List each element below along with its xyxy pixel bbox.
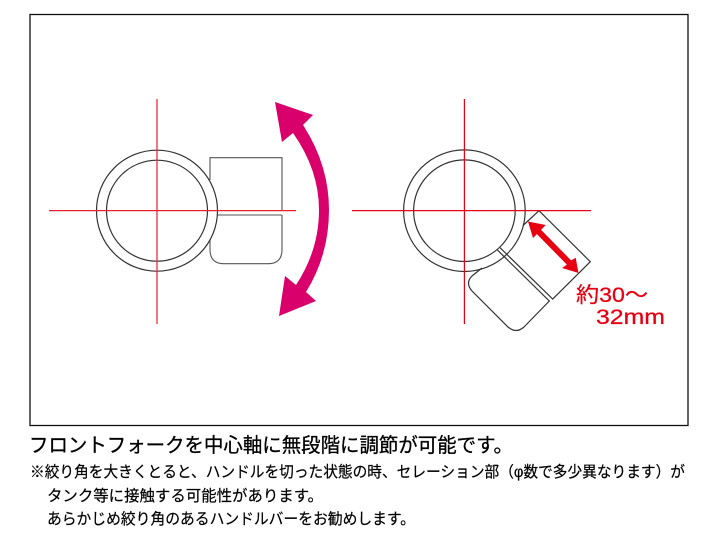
dimension label <box>576 284 665 329</box>
red crosshair <box>352 99 591 324</box>
note text <box>30 463 685 528</box>
handlebar clamp body <box>207 158 282 264</box>
panel: diagram frame <box>30 14 688 426</box>
note text: ※絞り角を大きくとると、ハンドルを切った状態の時、セレーション部（φ数で多少異なります）が <box>30 463 685 481</box>
diagram: fork clamp, straight position <box>49 99 296 324</box>
fork tube rings <box>404 150 525 272</box>
clamp lower block <box>468 249 549 330</box>
diagram: fork clamp, angled position <box>352 99 591 330</box>
clamp upper block <box>500 211 590 299</box>
note text: タンク等に接触する可能性があります。 <box>47 487 323 505</box>
arrow: red width dimension <box>528 222 578 273</box>
note text: あらかじめ絞り角のあるハンドルバーをお勧めします。 <box>47 510 415 528</box>
red crosshair <box>49 99 296 324</box>
arrow: magenta rotation arrow <box>275 102 329 316</box>
dimension label: 約30～ <box>576 284 648 307</box>
fork tube rings <box>96 150 218 271</box>
heading: フロントフォークを中心軸に無段階に調節が可能です。 <box>29 434 513 457</box>
dimension label: 32mm <box>596 306 665 329</box>
